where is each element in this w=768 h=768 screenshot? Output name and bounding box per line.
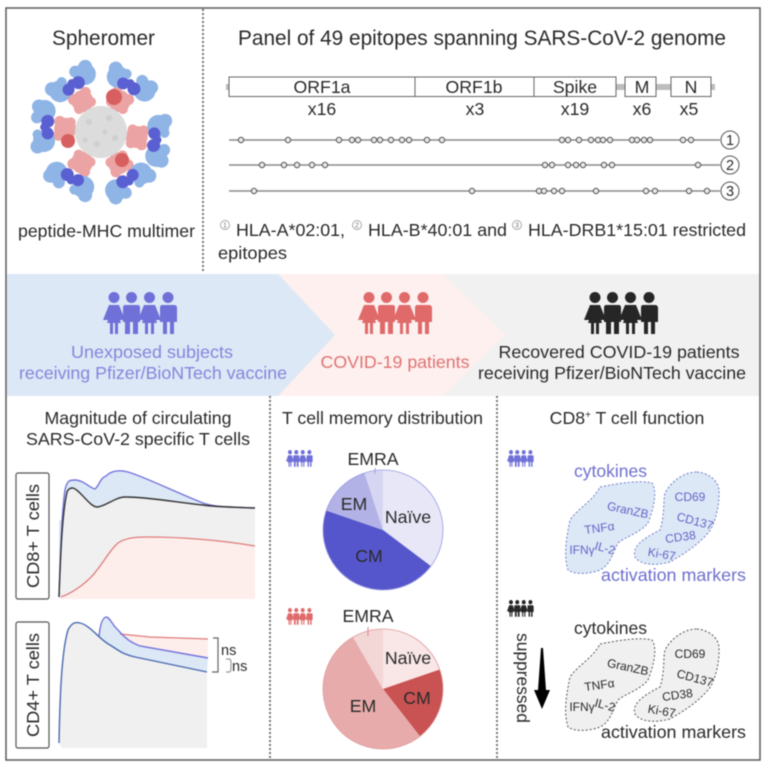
label: unexposed: Unexposed subjects bbox=[71, 342, 233, 362]
genome map: x3 bbox=[466, 99, 484, 119]
blobs: recovered: cytokines bbox=[574, 618, 647, 638]
divider top bbox=[202, 9, 204, 273]
blobs: recovered: Ki-67 bbox=[647, 702, 677, 720]
band: cohort chevrons bbox=[7, 274, 759, 396]
label: CD4 T cells bbox=[16, 622, 49, 748]
cohort: unexposed bbox=[19, 292, 287, 383]
icon: black people bbox=[584, 292, 658, 334]
blobs: vaccinated unexposed: TNFα bbox=[583, 519, 615, 537]
pie: unexposed: Naïve bbox=[385, 507, 431, 527]
label: unexposed: receiving Pfizer/BioNTech vaccine bbox=[19, 363, 287, 383]
legend text: 3 bbox=[515, 222, 519, 230]
pie: covid patients: EMRA bbox=[342, 606, 394, 626]
epitope tracks: 1 bbox=[726, 133, 734, 149]
blobs: recovered: activation markers bbox=[601, 722, 746, 742]
icon: red people small bbox=[286, 608, 313, 625]
genome map: M bbox=[635, 77, 649, 97]
cohort: covid patients bbox=[320, 292, 470, 372]
heading: Spheromer: Spheromer bbox=[52, 27, 155, 50]
epitope tracks: 2 bbox=[726, 158, 734, 174]
blobs: vaccinated unexposed: CD137 bbox=[675, 510, 715, 533]
heading: panel of 49 epitopes: Panel of 49 epitopes spanning SARS-CoV-2 genome bbox=[238, 27, 726, 50]
legend text: 2 bbox=[355, 222, 359, 230]
icon: blue people bbox=[103, 292, 177, 334]
blobs: recovered: IL-2 bbox=[593, 696, 617, 715]
panel: spheromer bbox=[18, 27, 195, 241]
label: CD8 T cells: CD8+ T cells bbox=[23, 484, 43, 588]
label: covid patients: COVID-19 patients bbox=[320, 352, 470, 372]
caption: peptide-MHC multimer: peptide-MHC multimer bbox=[18, 221, 195, 241]
label: recovered: receiving Pfizer/BioNTech vaccine bbox=[478, 363, 746, 383]
blobs: recovered: TNFα bbox=[583, 676, 615, 694]
significance brackets: ns bbox=[221, 643, 236, 659]
genome map: x6 bbox=[633, 99, 652, 119]
heading: magnitude: SARS-CoV-2 specific T cells bbox=[26, 429, 250, 449]
label: recovered bbox=[478, 342, 746, 383]
genome map: N bbox=[685, 77, 697, 97]
pie: covid patients bbox=[323, 606, 443, 749]
blobs: vaccinated unexposed bbox=[566, 461, 746, 585]
blobs: vaccinated unexposed: CD38 bbox=[664, 528, 697, 546]
panel: T cell function bbox=[507, 408, 746, 742]
significance brackets bbox=[212, 638, 247, 675]
blobs: vaccinated unexposed: IL-2 bbox=[593, 539, 617, 558]
legend text bbox=[218, 220, 746, 263]
dividers bottom bbox=[270, 396, 497, 759]
blobs: vaccinated unexposed: GranZB bbox=[606, 499, 650, 521]
panel: magnitude bbox=[16, 408, 255, 748]
blobs: vaccinated unexposed: Ki-67 bbox=[647, 545, 677, 563]
icon: blue people small bbox=[286, 450, 313, 467]
genome map: x16 bbox=[308, 99, 336, 119]
label: CD8 T cells bbox=[16, 473, 49, 599]
epitope tracks bbox=[229, 131, 739, 200]
cohort: recovered bbox=[478, 292, 746, 383]
pie: covid patients: EM bbox=[350, 696, 376, 716]
blobs: vaccinated unexposed: IFNγ bbox=[569, 543, 595, 557]
legend text: 1 bbox=[223, 222, 227, 230]
legend text: HLA-A*02:01, bbox=[236, 220, 345, 240]
panel: epitope panel bbox=[218, 27, 746, 263]
pie: unexposed: EM bbox=[341, 494, 367, 514]
pie: covid patients: CM bbox=[403, 688, 431, 708]
pie: covid patients: Naïve bbox=[385, 648, 431, 668]
pie: unexposed: CM bbox=[355, 546, 383, 566]
pie: unexposed bbox=[323, 449, 443, 590]
panel: memory distribution bbox=[282, 408, 483, 749]
pie: unexposed: EMRA bbox=[347, 449, 399, 469]
epitope tracks: 3 bbox=[726, 184, 734, 200]
significance brackets: ns bbox=[232, 659, 247, 675]
genome map: Spike bbox=[553, 77, 597, 97]
blobs: vaccinated unexposed: activation markers bbox=[601, 565, 746, 585]
blobs: recovered: CD69 bbox=[675, 647, 706, 661]
heading: CD8 function: T cell function bbox=[591, 408, 704, 428]
label: recovered: Recovered COVID-19 patients bbox=[498, 342, 740, 362]
legend text: HLA-DRB1*15:01 restricted bbox=[528, 220, 746, 240]
blobs: recovered: CD137 bbox=[675, 667, 715, 690]
legend text: epitopes bbox=[218, 243, 287, 263]
icon: red people bbox=[358, 292, 432, 334]
genome map bbox=[226, 77, 715, 119]
heading: memory distribution: T cell memory distribution bbox=[282, 408, 483, 428]
heading: magnitude: Magnitude of circulating bbox=[44, 408, 231, 428]
blobs: vaccinated unexposed: cytokines bbox=[574, 461, 647, 481]
blobs: recovered bbox=[566, 618, 746, 742]
blobs: recovered: IFNγ bbox=[569, 700, 595, 714]
heading: magnitude bbox=[26, 408, 250, 449]
icon: blue people tiny bbox=[507, 450, 534, 467]
genome map: x5 bbox=[680, 99, 698, 119]
legend text: HLA-B*40:01 and bbox=[368, 220, 507, 240]
heading: CD8 function: CD8 bbox=[550, 408, 585, 428]
chart: CD8 magnitude bbox=[59, 471, 255, 599]
genome map: ORF1b bbox=[445, 77, 503, 97]
arrow: suppressed bbox=[534, 648, 550, 709]
genome map: ORF1a bbox=[293, 77, 351, 97]
blobs: recovered: CD38 bbox=[661, 686, 694, 704]
icon: spheromer structure bbox=[28, 57, 175, 207]
genome map: x19 bbox=[561, 99, 589, 119]
label: suppressed: suppressed bbox=[513, 633, 533, 723]
chart: CD4 magnitude bbox=[59, 617, 208, 748]
blobs: vaccinated unexposed: CD69 bbox=[675, 490, 706, 504]
blobs: recovered: GranZB bbox=[606, 656, 650, 678]
label: CD4 T cells: CD4+ T cells bbox=[23, 633, 43, 737]
heading: CD8 function: + bbox=[585, 410, 591, 421]
label: unexposed bbox=[19, 342, 287, 383]
icon: black people tiny bbox=[507, 600, 534, 617]
